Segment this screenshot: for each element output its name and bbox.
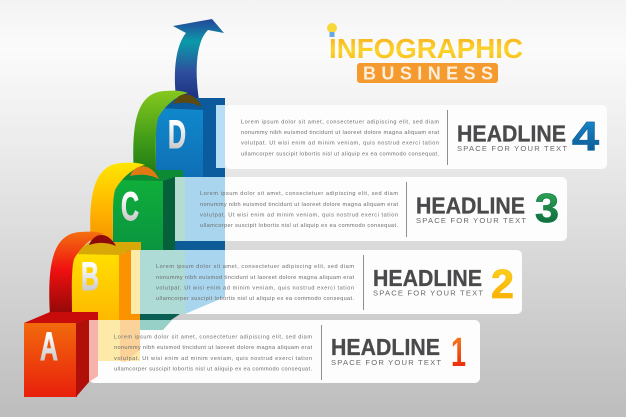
- letter A: A: [40, 325, 58, 369]
- tint: pink overlap: [89, 320, 98, 382]
- title text: INFOGRAPHIC: [329, 33, 523, 64]
- text block: volutpat. Ut wisi enim ad minim veniam, quis nostrud exerci tation: [114, 356, 312, 362]
- cube A: [24, 312, 98, 397]
- text block: volutpat. Ut wisi enim ad minim veniam, quis nostrud exerci tation: [156, 286, 354, 292]
- letter C: C: [121, 185, 139, 229]
- letter B: B: [81, 255, 99, 299]
- text block: nonummy nibh euismod tincidunt ut laoreet dolore magna aliquam erat: [156, 275, 354, 281]
- subheading: SPACE FOR YOUR TEXT: [331, 358, 441, 367]
- tint: orange overlap: [120, 320, 140, 362]
- subheading: SPACE FOR YOUR TEXT: [416, 216, 526, 225]
- tint: blue overlap: [185, 177, 225, 241]
- number 3: 3: [535, 185, 559, 231]
- ribbon: red: [49, 232, 116, 316]
- subheading: SPACE FOR YOUR TEXT: [373, 288, 483, 298]
- icon: light bulb: [327, 23, 337, 37]
- divider: [363, 255, 364, 310]
- text block: Lorem ipsum dolor sit amet, consectetuer adipiscing elit, sed diam: [241, 120, 439, 126]
- text block: ullamcorper suscipit lobortis nisl ut aliquip ex ea commodo consequat.: [241, 152, 439, 158]
- text block: nonummy nibh euismod tincidunt ut laoreet dolore magna aliquam erat: [114, 345, 312, 351]
- title: [327, 23, 523, 84]
- text block: volutpat. Ut wisi enim ad minim veniam, quis nostrud exerci tation: [241, 140, 439, 146]
- text block: Lorem ipsum dolor sit amet, consectetuer adipiscing elit, sed diam: [156, 264, 354, 270]
- number 1: 1: [451, 329, 466, 375]
- text block: [114, 334, 312, 372]
- ribbon: yellow: [90, 163, 159, 247]
- text block: [200, 191, 398, 229]
- tint: teal overlap: [140, 250, 185, 314]
- number 4: 4: [572, 113, 599, 159]
- heading: HEADLINE: [331, 334, 440, 360]
- text block: volutpat. Ut wisi enim ad minim veniam, quis nostrud exerci tation: [200, 212, 398, 218]
- text block: [241, 120, 439, 158]
- subheading: SPACE FOR YOUR TEXT: [457, 144, 567, 153]
- tint: yellow overlap: [131, 250, 140, 314]
- ribbon: green: [133, 91, 202, 175]
- text block: nonummy nibh euismod tincidunt ut laoreet dolore magna aliquam erat: [200, 202, 398, 208]
- text block: Lorem ipsum dolor sit amet, consectetuer adipiscing elit, sed diam: [114, 334, 312, 340]
- heading: HEADLINE: [416, 192, 525, 218]
- panel: step 3: [175, 177, 567, 241]
- panel: step 2: [131, 250, 522, 314]
- cube C: [113, 170, 225, 252]
- divider: [321, 325, 322, 380]
- text block: ullamcorper suscipit lobortis nisl ut aliquip ex ea commodo consequat.: [114, 366, 312, 372]
- divider: [406, 182, 407, 237]
- number 2: 2: [491, 261, 514, 307]
- letter D: D: [168, 113, 186, 157]
- tint: green overlap: [175, 177, 185, 241]
- text block: ullamcorper suscipit lobortis nisl ut aliquip ex ea commodo consequat.: [200, 223, 398, 229]
- heading: HEADLINE: [373, 265, 482, 291]
- text block: [156, 264, 354, 302]
- cube B: [72, 242, 180, 327]
- tint: yellow overlap: [98, 320, 140, 361]
- divider: [447, 110, 448, 165]
- panel: step 4: [225, 105, 607, 169]
- cube D: [156, 98, 225, 241]
- text block: Lorem ipsum dolor sit amet, consectetuer adipiscing elit, sed diam: [200, 191, 398, 197]
- tint: teal overlap: [140, 320, 172, 330]
- text block: ullamcorper suscipit lobortis nisl ut aliquip ex ea commodo consequat.: [156, 296, 354, 302]
- subtitle badge: BUSINESS: [363, 64, 493, 84]
- panel: step 1: [89, 320, 480, 383]
- text block: nonummy nibh euismod tincidunt ut laoreet dolore magna aliquam erat: [241, 130, 439, 136]
- arrow: blue ribbon: [173, 19, 224, 100]
- tint: blue overlap: [185, 250, 225, 314]
- heading: HEADLINE: [457, 120, 566, 146]
